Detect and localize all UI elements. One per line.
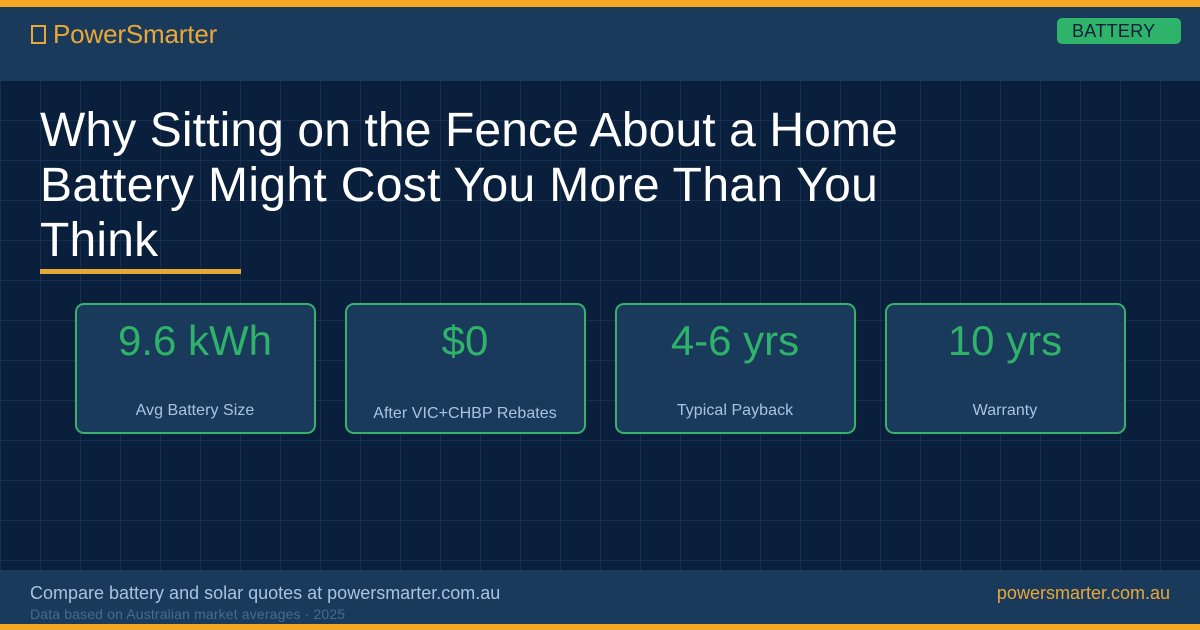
category badge xyxy=(1057,18,1181,44)
title: Why Sitting on the Fence About a Home xyxy=(40,104,898,157)
stat card: rebates: After VIC+CHBP Rebates xyxy=(373,405,557,422)
title underline xyxy=(40,269,241,274)
stat card: battery size: 9.6 kWh xyxy=(118,317,272,364)
category badge: BATTERY xyxy=(1072,21,1155,41)
stat card: battery size: Avg Battery Size xyxy=(136,402,254,419)
stat card: payback xyxy=(615,303,856,434)
footer call to action: Compare battery and solar quotes at powersmarter.com.au xyxy=(30,583,500,603)
logo: PowerSmarter xyxy=(53,19,217,49)
stat card: rebates: $0 xyxy=(442,317,488,364)
stat card: warranty: Warranty xyxy=(973,402,1037,419)
icon: missing-glyph box xyxy=(31,25,46,44)
stat card: warranty xyxy=(885,303,1126,434)
footer website: powersmarter.com.au xyxy=(997,583,1170,603)
footer data note: Data based on Australian market averages · 2025 xyxy=(30,606,345,622)
footer bar xyxy=(0,570,1200,624)
stat card: rebates xyxy=(345,303,586,434)
stat card: payback: Typical Payback xyxy=(677,402,793,419)
title: Battery Might Cost You More Than You xyxy=(40,159,878,212)
title xyxy=(40,104,898,267)
title: Think xyxy=(40,214,158,267)
stat card: battery size xyxy=(75,303,316,434)
stat card: payback: 4-6 yrs xyxy=(671,317,799,364)
bottom accent stripe xyxy=(0,624,1200,630)
header bar xyxy=(0,0,1200,81)
top accent stripe xyxy=(0,0,1200,7)
stat card: warranty: 10 yrs xyxy=(948,317,1062,364)
